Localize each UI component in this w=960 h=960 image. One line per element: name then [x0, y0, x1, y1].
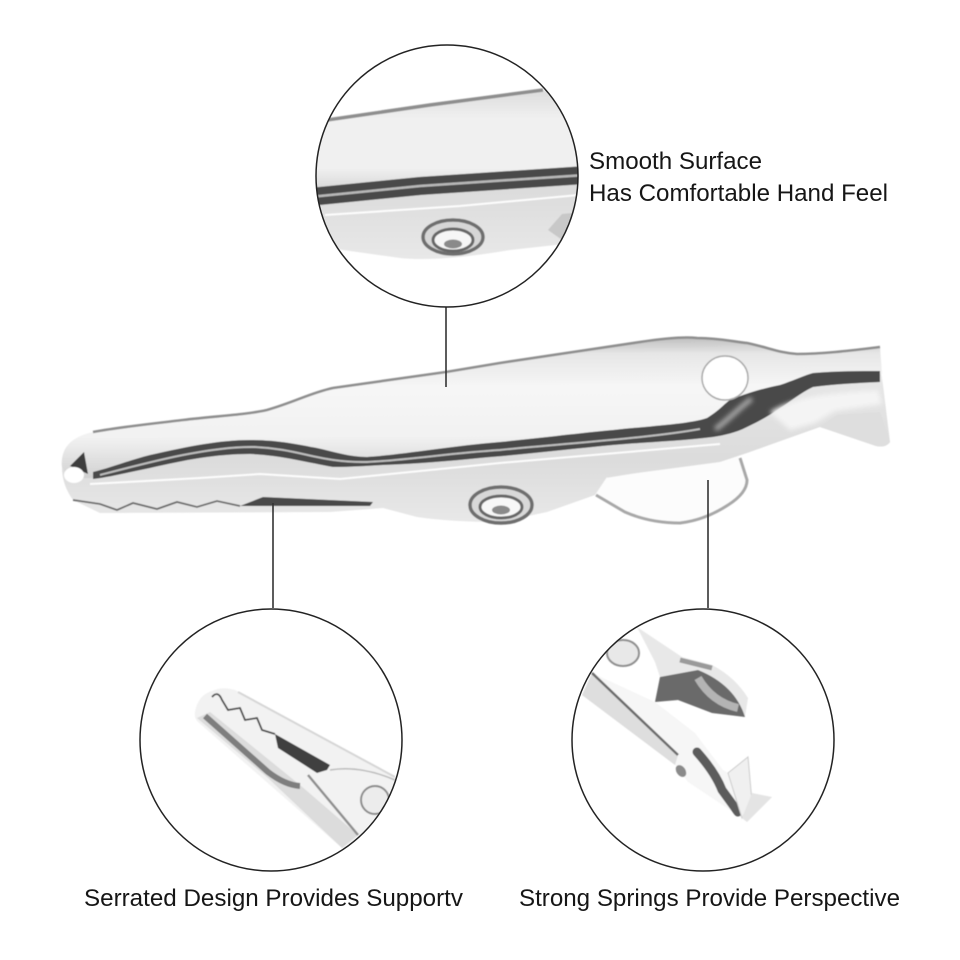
mounting hole [702, 356, 748, 400]
callout circle: serrated jaw detail [140, 609, 402, 880]
caption: serrated design: Serrated Design Provides Supportv [84, 885, 463, 912]
dark groove [93, 371, 880, 479]
rivet [470, 487, 532, 523]
callout text: smooth surface [589, 148, 888, 207]
connector line: smooth surface [445, 307, 447, 387]
tip glint [64, 452, 88, 483]
callout text: smooth surface: Has Comfortable Hand Feel [589, 180, 888, 207]
spring tail behind clip [595, 455, 747, 523]
serrated jaw [73, 497, 373, 510]
top edge shading [93, 338, 880, 432]
callout circle: smooth surface detail [315, 44, 579, 308]
callout text: smooth surface: Smooth Surface [589, 148, 762, 175]
connector line: serrated design [272, 503, 274, 608]
caption: strong springs: Strong Springs Provide Perspective [519, 885, 900, 912]
connector line: strong springs [707, 480, 709, 608]
callout circle: spring detail [572, 609, 834, 871]
clip lower lip and rear tab [62, 365, 890, 522]
highlight on lower lip [90, 444, 720, 484]
clip upper body [62, 338, 882, 478]
main product: alligator clip [62, 338, 890, 523]
